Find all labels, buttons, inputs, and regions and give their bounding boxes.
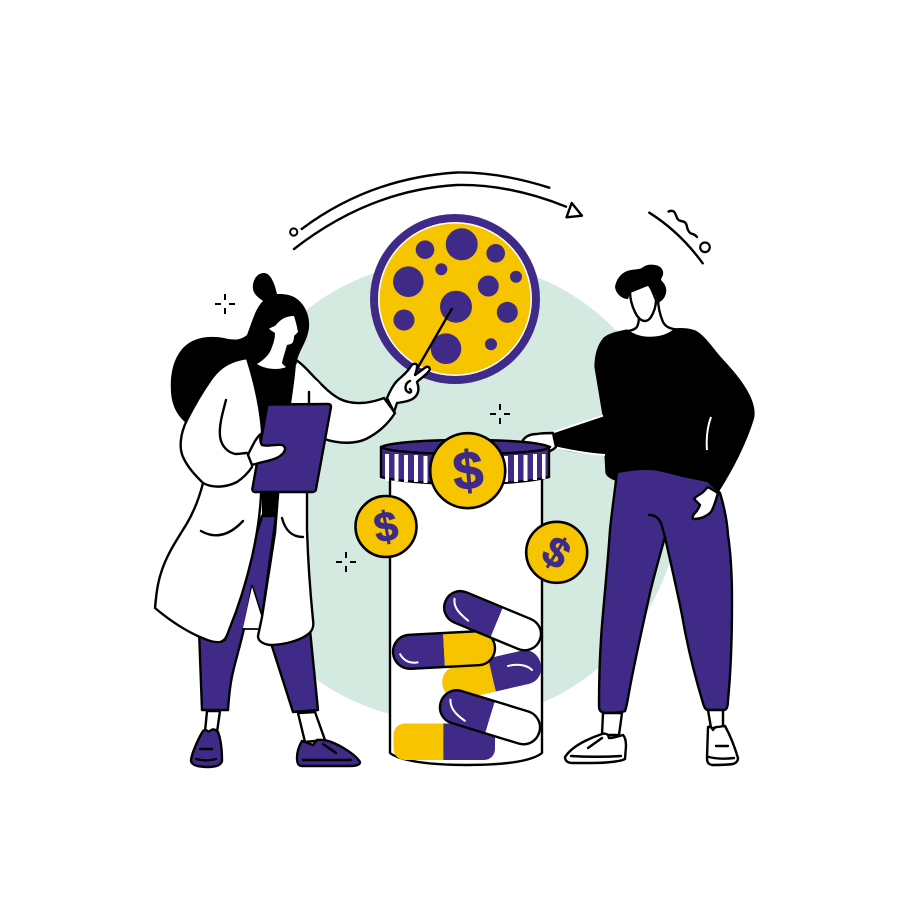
sparkle 1 — [215, 294, 235, 314]
decorative arrow arcs — [290, 172, 710, 263]
face — [257, 316, 298, 369]
coin large — [430, 433, 505, 508]
dollar sign: $ — [370, 501, 401, 552]
left sleeve lower edge — [203, 467, 252, 487]
jar lid — [381, 440, 550, 484]
coat collar line — [308, 392, 310, 403]
sparkle 3 — [336, 552, 356, 572]
clipboard — [252, 404, 331, 492]
lid top — [381, 440, 550, 454]
coin right — [526, 522, 587, 583]
pill bottle — [381, 440, 550, 765]
pill bottom yellow-purple — [394, 724, 495, 760]
black shirt — [250, 358, 297, 517]
neck — [624, 295, 680, 345]
squiggle — [668, 211, 697, 237]
arrow triangle head — [566, 203, 582, 217]
dollar sign: $ — [450, 440, 486, 502]
dish yellow culture — [380, 224, 530, 374]
petri dish — [374, 218, 536, 380]
gap line — [242, 628, 259, 630]
gap between legs — [243, 587, 262, 628]
trousers — [599, 469, 732, 713]
right small circle — [700, 242, 710, 252]
pill yellow-purple tilted — [439, 647, 545, 703]
socks — [602, 710, 723, 735]
right shoe — [297, 740, 360, 766]
man — [523, 265, 754, 765]
jar body — [390, 478, 542, 765]
left shoe — [191, 729, 222, 767]
lid stripes — [385, 454, 546, 483]
dollar sign: $ — [534, 526, 579, 579]
culture spots — [393, 228, 522, 364]
lab coat left side — [155, 358, 262, 642]
dish ring — [374, 218, 536, 380]
pill purple-white top — [439, 586, 546, 655]
hand on jar lid — [523, 433, 556, 452]
trouser left leg — [199, 516, 276, 710]
sweater — [554, 329, 754, 492]
hand on clipboard — [248, 434, 285, 465]
sweater highlights — [554, 416, 711, 455]
left shoe — [565, 734, 626, 763]
arc arrow top — [302, 172, 549, 229]
sparkles — [215, 294, 510, 572]
right shoe — [707, 726, 738, 765]
background green circle — [219, 260, 681, 722]
face — [630, 284, 656, 321]
pointing hand — [387, 364, 430, 412]
small circle — [290, 228, 297, 236]
arc arrow lower — [294, 185, 566, 249]
hair — [171, 273, 309, 423]
pill purple-white lower — [436, 686, 544, 748]
pocket hand — [693, 487, 718, 519]
coat interior cover — [285, 364, 340, 490]
woman doctor — [155, 273, 452, 767]
pill purple-yellow outlined — [392, 630, 496, 670]
coin left — [356, 496, 416, 557]
sparkle 2 — [490, 404, 510, 424]
left sleeve crease — [220, 400, 247, 454]
lab coat right side — [258, 430, 313, 645]
right sleeve — [290, 360, 395, 470]
pointer stick — [417, 309, 452, 369]
trouser right leg — [270, 630, 318, 712]
trouser crease — [649, 515, 665, 537]
socks — [205, 711, 325, 742]
right arc — [649, 213, 703, 263]
pockets — [201, 518, 303, 537]
hair — [615, 265, 666, 303]
